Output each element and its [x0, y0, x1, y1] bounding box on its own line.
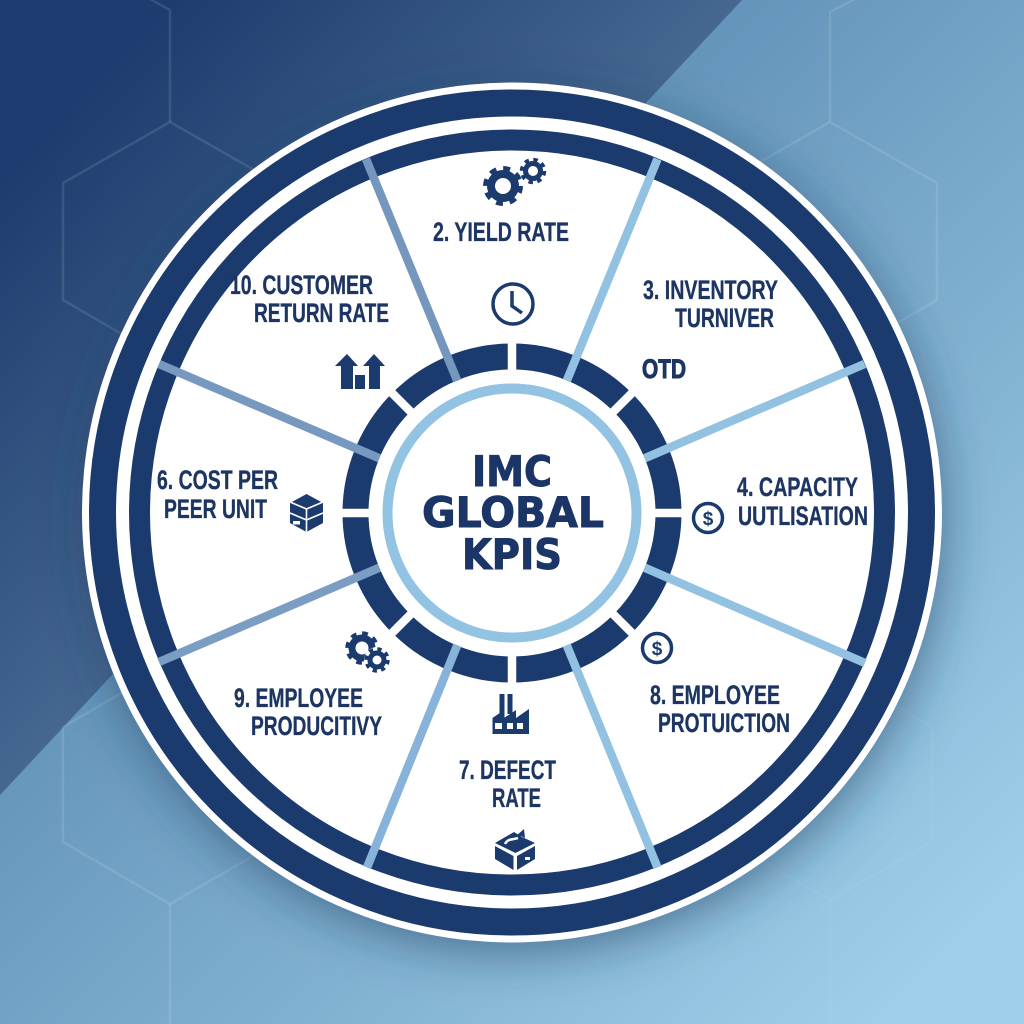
- label: inventory turniver: [643, 275, 778, 333]
- label: customer return rate: RETURN RATE: [254, 298, 389, 328]
- center title: IMC: [472, 447, 552, 496]
- label: employee productivity: [234, 683, 382, 741]
- center light blue ring: [388, 388, 636, 638]
- label: employee productivity: 9. EMPLOYEE: [234, 683, 363, 713]
- label: capacity utilisation: UUTLISATION: [738, 501, 868, 531]
- label: cost per unit: PEER UNIT: [164, 494, 267, 524]
- center title: KPIS: [462, 530, 562, 579]
- label: capacity utilisation: 4. CAPACITY: [737, 472, 858, 502]
- icon: dollar coin capacity: $: [703, 509, 714, 530]
- label: employee protuiction: PROTUICTION: [658, 708, 790, 738]
- icon: up arrows: [335, 354, 385, 389]
- icon: package cube: [290, 494, 323, 532]
- label: customer return rate: [230, 270, 389, 328]
- label: inventory turniver: TURNIVER: [675, 303, 774, 333]
- center title: GLOBAL: [422, 488, 604, 537]
- center title: [422, 447, 604, 579]
- outer white disc: [82, 82, 942, 942]
- label: defect rate: RATE: [492, 783, 541, 813]
- label: inventory turniver: 3. INVENTORY: [643, 275, 778, 305]
- spokes: [159, 159, 865, 868]
- label: employee protuiction: 8. EMPLOYEE: [650, 680, 780, 710]
- segmented hub ring: [334, 335, 690, 691]
- label: cost per unit: 6. COST PER: [157, 465, 278, 495]
- icon: factory: [492, 694, 529, 734]
- label: defect rate: 7. DEFECT: [459, 755, 556, 785]
- label: customer return rate: 10. CUSTOMER: [230, 270, 373, 300]
- label: capacity utilisation: [737, 472, 868, 531]
- icon: clock: [493, 284, 533, 324]
- icon: dollar coin capacity: [694, 504, 722, 532]
- icon: gears top: [486, 160, 544, 204]
- icon: dollar coin employee: $: [652, 639, 663, 660]
- icon: open box: [495, 829, 535, 870]
- disc shadow: [85, 94, 945, 954]
- label: OTD: OTD: [642, 354, 686, 384]
- label: yield rate: 2. YIELD RATE: [433, 217, 569, 247]
- label: defect rate: [459, 755, 556, 813]
- label: employee productivity: PRODUCITIVY: [251, 711, 382, 741]
- icon: dollar coin employee: [642, 634, 672, 662]
- inner navy ring: [140, 140, 884, 885]
- label: cost per unit: [157, 465, 278, 524]
- label: employee protuiction: [650, 680, 790, 738]
- KPI wheel: [82, 82, 942, 942]
- outer navy ring: [102, 103, 922, 922]
- icon: gears employee productivity: [348, 634, 390, 673]
